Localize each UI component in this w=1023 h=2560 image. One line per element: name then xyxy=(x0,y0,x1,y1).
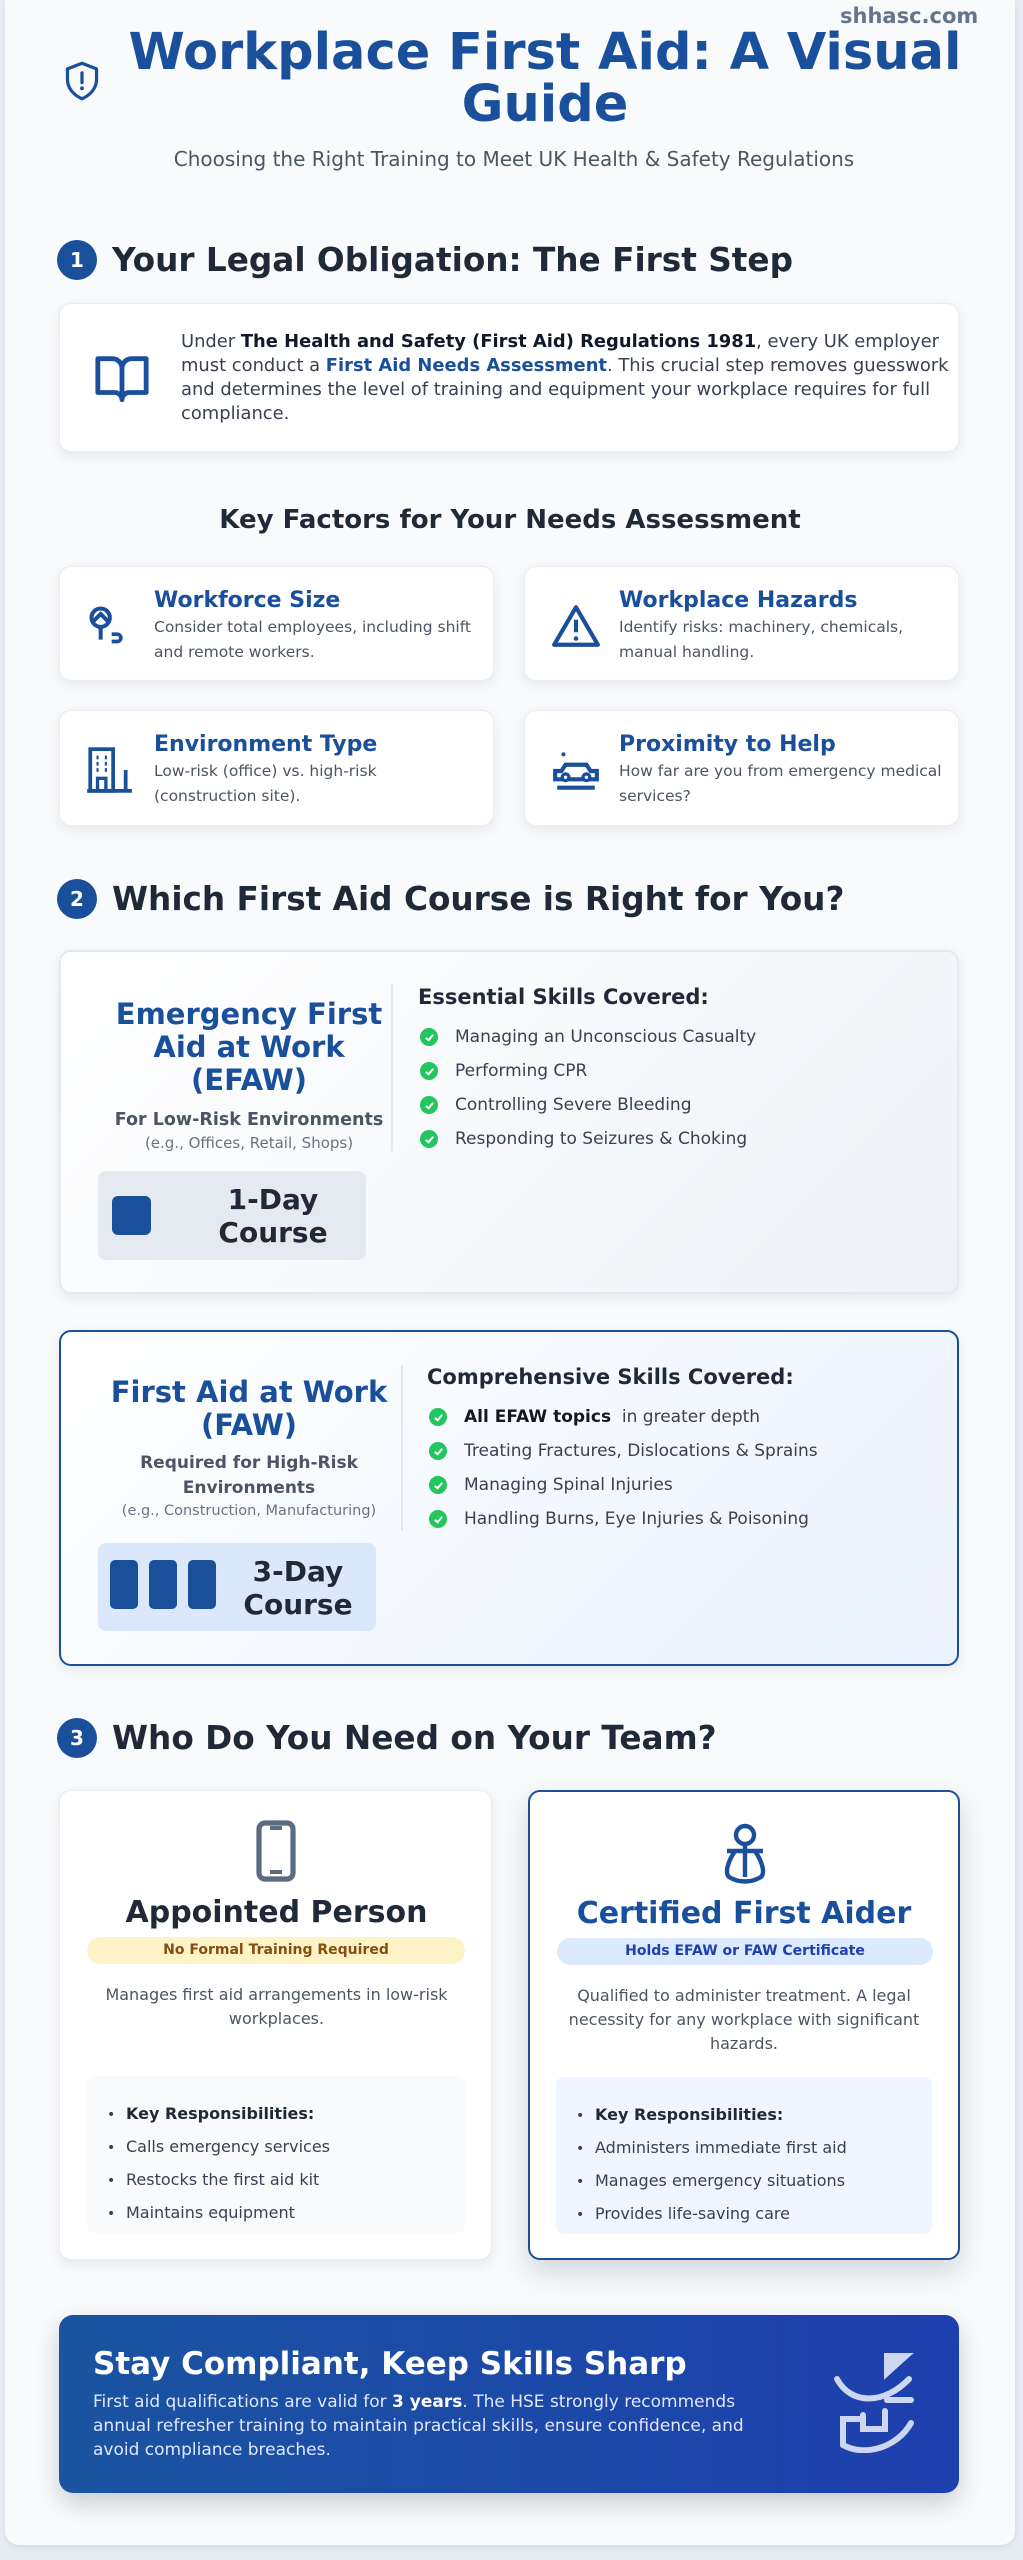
text: environment: Low-risk (office) vs. high-risk xyxy=(154,762,377,780)
list: comprehensive skills: in greater depth xyxy=(622,1407,760,1427)
callout: stay compliant xyxy=(59,2315,959,2493)
text: FAW title: (e.g., Construction, Manufacturing) xyxy=(122,1503,376,1519)
icon: book xyxy=(95,356,149,402)
subtitle: Choosing the Right Training to Meet UK Health & Safety Regulations xyxy=(174,147,854,171)
icon: refresh xyxy=(834,2353,914,2453)
list: appointed responsibilities: Restocks the first aid kit xyxy=(126,2170,319,2189)
text: hazards xyxy=(619,588,903,661)
panel: EFAW xyxy=(59,950,959,1294)
text: FAW title: (FAW) xyxy=(201,1408,297,1442)
text: workforce: Workforce Size xyxy=(154,588,340,613)
text: environment: Environment Type xyxy=(154,732,377,757)
badge: 3-day xyxy=(98,1543,376,1631)
badge: 1-day: 1-Day Course xyxy=(218,1183,328,1249)
list: essential skills: Controlling Severe Bleeding xyxy=(455,1095,692,1115)
list: essential skills: Responding to Seizures & Choking xyxy=(455,1129,747,1149)
text: EFAW title: (EFAW) xyxy=(191,1063,307,1097)
list: comprehensive skills: Comprehensive Skills Covered: xyxy=(427,1365,794,1389)
section 2 heading: Which First Aid Course is Right for You? xyxy=(112,880,844,918)
text: proximity xyxy=(619,732,942,805)
text: proximity: How far are you from emergency medical services? xyxy=(619,762,942,805)
text: EFAW title: Aid at Work xyxy=(153,1030,345,1064)
text: callout body: First aid qualifications are valid for 3 years. The HSE strongly recommends annual refresher training to maintain practical skills, ensure confidence, and avoid compliance breaches. xyxy=(93,2392,744,2460)
badge: 1-day xyxy=(98,1171,366,1260)
panel: workplace hazards xyxy=(524,566,959,681)
text: FAW title: First Aid at Work xyxy=(111,1375,387,1409)
text: proximity: Proximity to Help xyxy=(619,732,836,757)
list: comprehensive skills: Treating Fractures, Dislocations & Sprains xyxy=(464,1441,818,1461)
text: workforce xyxy=(154,588,471,661)
list: certified responsibilities: Manages emergency situations xyxy=(595,2171,845,2190)
title: Workplace First Aid: A Visual xyxy=(129,23,961,82)
section 2 heading: 2 xyxy=(70,887,84,911)
list: appointed responsibilities xyxy=(87,2076,465,2233)
text: environment xyxy=(154,732,377,805)
panel: proximity xyxy=(524,710,959,826)
list: certified responsibilities: Key Responsibilities: xyxy=(595,2105,783,2124)
list: comprehensive skills: All EFAW topics xyxy=(464,1407,611,1427)
text: appointed person title: Appointed Person xyxy=(126,1895,427,1930)
panel: legal obligation xyxy=(59,303,959,452)
text: FAW title: Required for High-Risk xyxy=(140,1453,358,1473)
watermark: shhasc.com xyxy=(840,4,978,28)
badge: no formal training xyxy=(87,1937,465,1964)
list: essential skills: Essential Skills Covered: xyxy=(418,985,709,1009)
text: legal intro: Under The Health and Safety (First Aid) Regulations 1981, every UK employer must conduct a First Aid Needs Assessment. This crucial step removes guesswork and determines the level of training and equipment your workplace requires for full compliance. xyxy=(181,331,949,424)
text: EFAW title: For Low-Risk Environments xyxy=(115,1110,383,1130)
list: comprehensive skills xyxy=(427,1365,818,1529)
section 1 heading: 1 xyxy=(70,248,84,272)
list: certified responsibilities: Provides life-saving care xyxy=(595,2204,790,2223)
icon: warning xyxy=(552,605,600,647)
heading: key factors: Key Factors for Your Needs Assessment xyxy=(219,505,801,535)
badge: holds certificate: Holds EFAW or FAW Certificate xyxy=(625,1943,865,1959)
list: comprehensive skills: Handling Burns, Eye Injuries & Poisoning xyxy=(464,1509,809,1529)
panel: FAW xyxy=(59,1330,959,1666)
icon: first aider xyxy=(724,1824,766,1884)
section 1 heading: Your Legal Obligation: The First Step xyxy=(112,241,793,279)
text: certified title: Certified First Aider xyxy=(577,1896,911,1931)
list: essential skills: Managing an Unconscious Casualty xyxy=(455,1027,756,1047)
text: EFAW title: (e.g., Offices, Retail, Shops) xyxy=(145,1134,353,1152)
text: certified description: Qualified to administer treatment. A legal necessity for any workplace with significant hazards. xyxy=(569,1986,919,2053)
text: FAW title: Environments xyxy=(183,1478,315,1498)
list: appointed responsibilities: Maintains equipment xyxy=(126,2203,295,2222)
panel: appointed person xyxy=(59,1790,492,2260)
list: appointed responsibilities: Calls emergency services xyxy=(126,2137,330,2156)
text: environment: (construction site). xyxy=(154,787,300,805)
badge: 3-day: 3-Day Course xyxy=(243,1555,353,1621)
text: appointed description: Manages first aid arrangements in low-risk workplaces. xyxy=(105,1985,448,2028)
text: hazards: Identify risks: machinery, chemicals, manual handling. xyxy=(619,618,903,661)
list: certified responsibilities: Administers immediate first aid xyxy=(595,2138,847,2157)
badge: holds certificate xyxy=(557,1938,933,1965)
panel: environment type xyxy=(59,710,494,826)
panel: workforce size xyxy=(59,566,494,681)
text: hazards: Workplace Hazards xyxy=(619,588,857,613)
text: callout title: Stay Compliant, Keep Skills Sharp xyxy=(93,2346,687,2382)
text: FAW title xyxy=(111,1375,388,1519)
text: workforce: Consider total employees, including shift and remote workers. xyxy=(154,618,471,661)
list: essential skills xyxy=(418,985,756,1149)
icon: vehicle xyxy=(553,752,599,790)
list: comprehensive skills: Managing Spinal Injuries xyxy=(464,1475,673,1495)
text: EFAW title: Emergency First xyxy=(116,997,382,1031)
list: essential skills: Performing CPR xyxy=(455,1061,587,1081)
panel: certified first aider xyxy=(528,1790,960,2260)
icon: phone xyxy=(256,1820,296,1882)
icon: shield xyxy=(66,62,98,100)
badge: no formal training: No Formal Training Required xyxy=(163,1942,389,1958)
title: Guide xyxy=(462,75,628,134)
section 3 heading: 3 xyxy=(70,1726,84,1750)
list: appointed responsibilities: Key Responsibilities: xyxy=(126,2104,314,2123)
section 3 heading: Who Do You Need on Your Team? xyxy=(112,1719,717,1757)
list: certified responsibilities xyxy=(556,2077,932,2234)
text: EFAW title xyxy=(115,997,383,1152)
title xyxy=(129,23,961,134)
icon: workforce xyxy=(90,606,123,644)
icon: building xyxy=(87,747,132,793)
